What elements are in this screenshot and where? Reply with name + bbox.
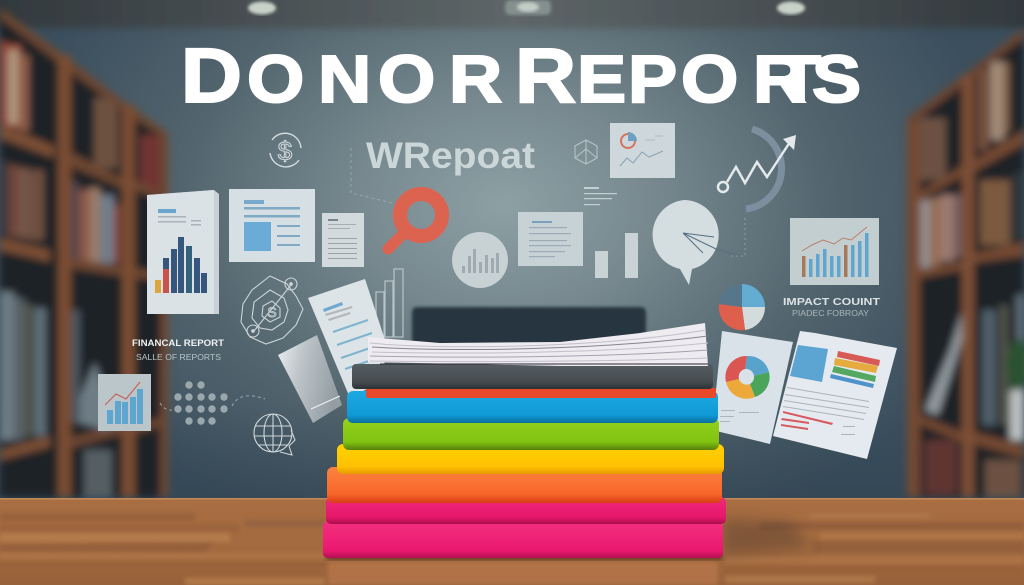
chair back — [412, 307, 646, 352]
text lines — [584, 187, 617, 205]
sub-heading: WRepoat: WRepoat — [366, 135, 535, 176]
table — [0, 498, 1024, 585]
books: right shelf — [918, 62, 1024, 497]
paper stack — [368, 323, 708, 366]
document: text with blue block — [229, 189, 315, 262]
icon: network web — [241, 276, 303, 344]
dashed connector — [351, 148, 392, 203]
document: bar chart report — [147, 190, 219, 314]
book: blue — [347, 391, 718, 423]
label: financial report — [132, 338, 224, 362]
icon: magnifier — [388, 194, 442, 249]
label: impact count: PIADEC FOBROAY — [792, 308, 869, 318]
bar chart blocks — [595, 233, 638, 278]
icon: circle with bars — [452, 232, 508, 288]
label: impact count — [783, 296, 881, 318]
icon: growth arrow with arc — [718, 129, 796, 209]
document: slanted report sheet — [308, 279, 385, 398]
book: green — [343, 418, 719, 450]
label: impact count: IMPACT COUINT — [783, 296, 881, 308]
shelf boards: left — [0, 8, 168, 497]
speech bubble — [653, 200, 745, 285]
icon: dollar circle — [270, 133, 301, 167]
icon: line bars behind sheet — [376, 269, 403, 337]
book: pink — [326, 497, 726, 524]
label: financial report: SALLE OF REPORTS — [136, 352, 221, 362]
right bookshelf — [907, 28, 1024, 497]
icon: hexagon — [575, 140, 597, 164]
bar chart in report — [155, 237, 207, 293]
document: text lines card — [518, 212, 583, 266]
label: financial report: FINANCAL REPORT — [132, 338, 224, 349]
right page — [773, 331, 897, 459]
chart card: impact — [790, 218, 879, 285]
book: yellow — [337, 444, 724, 474]
book: bottom pink — [323, 521, 723, 558]
pie chart — [719, 284, 765, 330]
title: DONOR REPORTS — [181, 34, 861, 119]
book: dark grey — [352, 364, 713, 389]
books: left shelf — [0, 42, 160, 497]
open report booklet — [712, 331, 897, 459]
document: donut and line chart — [610, 123, 675, 178]
document: small table — [322, 213, 364, 267]
icon: globe — [254, 414, 295, 455]
grey folded sheet — [278, 335, 342, 423]
icon: dollar circle: $ — [278, 136, 293, 166]
shelf boards: right — [907, 28, 1024, 497]
dotted arrow icon — [160, 381, 265, 425]
left page — [712, 331, 793, 444]
book: red strip — [366, 388, 716, 398]
shadow beside stack — [722, 518, 812, 556]
background: ceiling with lights — [0, 0, 1024, 28]
stack of reports — [323, 323, 726, 558]
book: orange — [327, 467, 722, 503]
small chart card — [98, 374, 151, 431]
icon: network web: S — [267, 304, 277, 320]
shadow under stack — [326, 555, 722, 560]
left bookshelf — [0, 8, 168, 497]
